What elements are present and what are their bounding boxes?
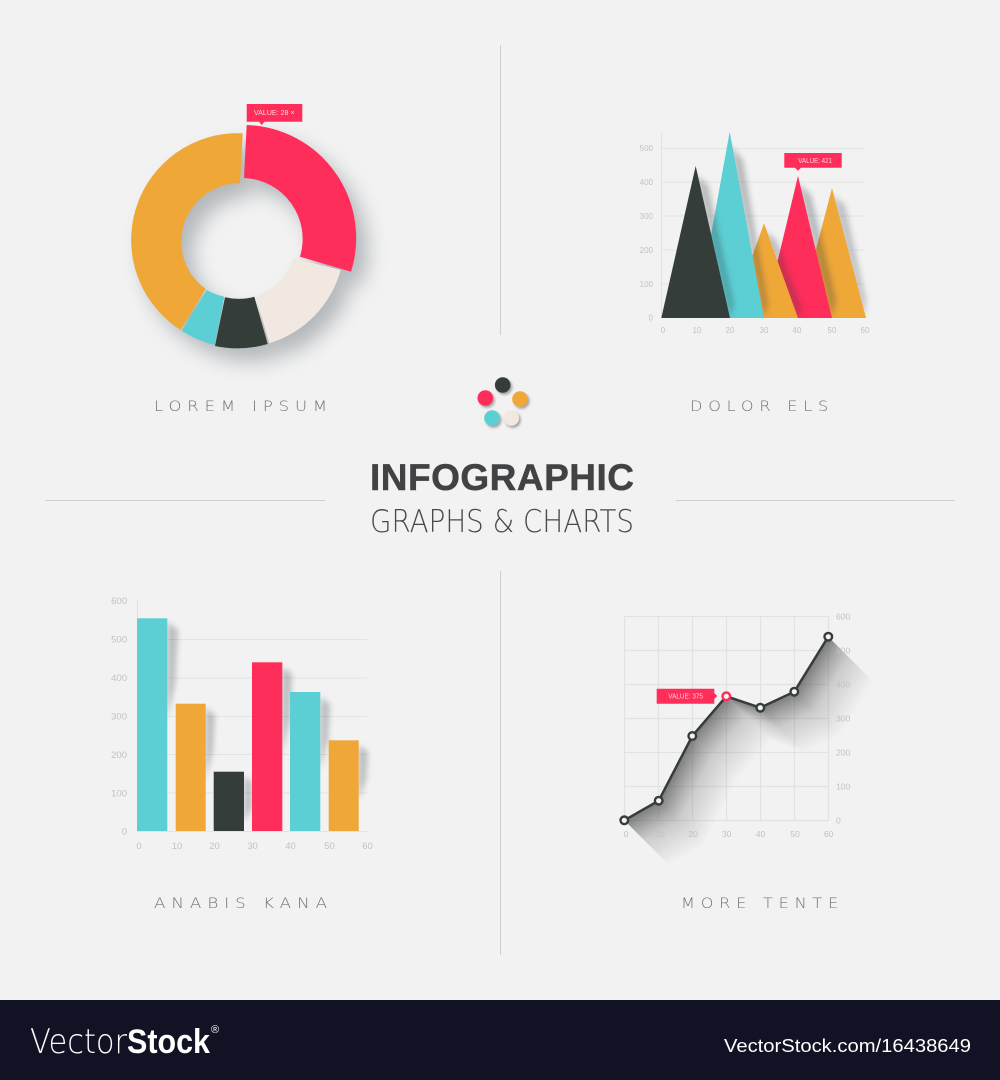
triangle chart x axis labels: 10 (693, 326, 702, 335)
line chart x axis labels: 50 (790, 829, 800, 839)
triangle chart x axis labels: 0 (661, 326, 666, 335)
bar: orange 10 (176, 704, 206, 831)
value tag: 421: VALUE: 421 (798, 158, 832, 165)
donut shadow (142, 138, 367, 361)
triangle: teal 20 (696, 132, 764, 318)
bar: teal 40 (290, 692, 320, 831)
line chart x axis labels: 20 (688, 829, 698, 839)
triangle chart x axis labels: 20 (726, 326, 735, 335)
line chart right axis labels: 100 (836, 782, 851, 792)
bar chart y axis labels (111, 596, 127, 838)
panel: triangle chart (640, 132, 870, 335)
triangle chart x axis labels: 50 (828, 326, 837, 335)
triangle chart y axis labels: 0 (649, 314, 654, 322)
slice: teal (182, 290, 224, 345)
line chart x axis labels: 30 (722, 829, 732, 839)
bar chart y axis labels: 0 (122, 826, 127, 838)
triangle: red 40 (764, 176, 832, 318)
triangle chart y axis labels: 100 (640, 280, 654, 289)
value tag: 375 (657, 689, 717, 704)
line chart right axis labels: 500 (836, 646, 851, 656)
triangle chart x axis labels: 40 (793, 326, 802, 335)
bar chart x axis labels: 60 (362, 841, 373, 852)
title: INFOGRAPHIC (370, 457, 634, 498)
triangles with shadows (661, 132, 866, 318)
bar chart y axis labels: 400 (111, 673, 127, 684)
bar chart x axis labels: 10 (172, 841, 182, 852)
panel: line chart (620, 612, 873, 865)
bar chart x axis labels: 0 (136, 841, 142, 852)
subtitle: GRAPHS & CHARTS (370, 504, 634, 540)
bar: dark 20 (214, 772, 244, 831)
caption: dolor els: DOLOR ELS (690, 399, 834, 415)
bar: orange 50 (329, 740, 359, 831)
value tag: 375: VALUE: 375 (668, 694, 703, 700)
value tag: 28 (247, 104, 302, 125)
value tag: 28: VALUE: 28 × (254, 110, 294, 117)
bar chart y axis labels: 300 (111, 712, 127, 722)
data points (620, 633, 832, 824)
footer logo mark: ® (211, 1024, 219, 1036)
triangle chart x axis labels (661, 326, 870, 335)
line chart right axis labels: 600 (836, 612, 851, 622)
triangle chart y axis labels: 500 (640, 144, 654, 153)
bar chart y axis labels: 500 (111, 634, 127, 646)
bar: teal 0 (137, 618, 167, 831)
triangle chart y axis labels (640, 144, 654, 322)
caption: lorem ipsum: LOREM IPSUM (154, 399, 333, 415)
bar chart x axis labels: 40 (285, 841, 296, 852)
footer logo: VectorStock (30, 1022, 210, 1062)
bar chart x axis labels: 30 (247, 841, 258, 852)
triangle: dark 10 (661, 166, 730, 318)
triangle chart x axis labels: 30 (760, 326, 769, 335)
bar chart grid (137, 600, 367, 832)
long shadow under line (624, 637, 873, 865)
line chart right axis labels: 0 (836, 816, 841, 826)
caption: more tente: MORE TENTE (681, 896, 844, 912)
line chart right axis labels: 400 (836, 680, 851, 690)
line chart x axis labels (624, 829, 834, 839)
line chart x axis labels: 10 (655, 829, 665, 839)
line chart grid (624, 616, 828, 820)
triangle chart y axis labels: 300 (640, 212, 654, 221)
bar chart x axis labels: 50 (324, 841, 335, 852)
bar: red 30 (252, 662, 282, 831)
triangle: orange 30 (730, 223, 798, 318)
line chart x axis labels: 60 (824, 829, 834, 839)
bar chart y axis labels: 200 (111, 750, 127, 761)
line chart right axis labels (836, 612, 851, 826)
bar chart y axis labels: 100 (111, 788, 127, 800)
triangle chart y axis labels: 400 (640, 178, 654, 187)
slice: dark (215, 297, 268, 348)
slice: orange (131, 133, 243, 330)
value tag: 421 (784, 153, 842, 171)
footer url: VectorStock.com/16438649 (724, 1036, 971, 1056)
caption: anabis kana: ANABIS KANA (154, 896, 333, 912)
panel: bar chart (111, 596, 373, 852)
highlighted data point (722, 692, 730, 700)
bar shadows (167, 622, 368, 822)
triangle chart x axis labels: 60 (861, 326, 870, 335)
icon: five colored dots (478, 377, 530, 428)
triangle chart grid (661, 133, 865, 318)
data line (624, 637, 828, 820)
panel: donut chart (131, 104, 367, 361)
line chart right axis labels: 300 (836, 714, 851, 724)
slice: cream (256, 258, 341, 343)
line chart x axis labels: 0 (624, 829, 629, 839)
slice: red (244, 125, 356, 272)
line chart x axis labels: 40 (756, 829, 766, 839)
triangle: orange 50 (798, 188, 866, 318)
bar chart y axis labels: 600 (111, 596, 127, 607)
bar chart x axis labels (136, 841, 373, 852)
footer bar (0, 1000, 1000, 1080)
bar chart x axis labels: 20 (209, 841, 220, 852)
line chart right axis labels: 200 (836, 748, 851, 758)
triangle chart y axis labels: 200 (640, 246, 654, 255)
